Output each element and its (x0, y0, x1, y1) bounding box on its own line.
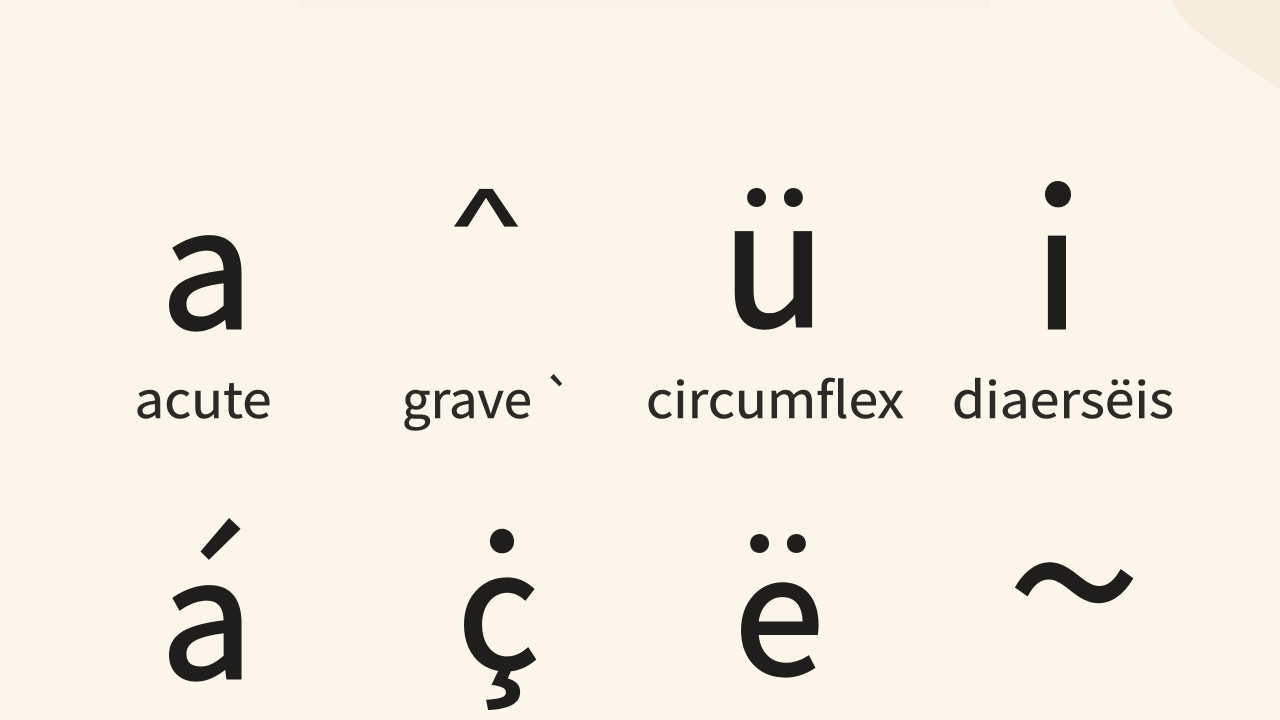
label: circumflex: circumflex (646, 361, 904, 433)
item: e diaeresis: e (734, 486, 824, 720)
item: a with acute: ´ (157, 466, 267, 720)
item: a acute: a (161, 139, 253, 376)
item: c cedilla with dot: ˙ (469, 441, 535, 629)
top edge band (300, 0, 990, 8)
item: i: ˙ (1023, 87, 1093, 289)
item: circumflex mark (402, 156, 574, 433)
item: a with acute: a (161, 489, 253, 720)
item: i: ı (1033, 128, 1081, 378)
label: acute: acute (134, 361, 272, 433)
item: i (952, 87, 1174, 433)
item: c cedilla with dot: ç (457, 483, 539, 715)
item: u diaeresis: ¨ (723, 120, 827, 370)
item: a acute (134, 139, 272, 433)
item: e diaeresis: ¨ (726, 466, 830, 716)
label: diaerseis: diaersëis (952, 361, 1174, 433)
item: circumflex mark: ^ (445, 156, 527, 278)
item: u diaeresis (646, 120, 904, 433)
item: u diaeresis: u (722, 126, 826, 376)
corner paper fold (1172, 0, 1280, 90)
label: grave: grave ` (402, 361, 574, 433)
